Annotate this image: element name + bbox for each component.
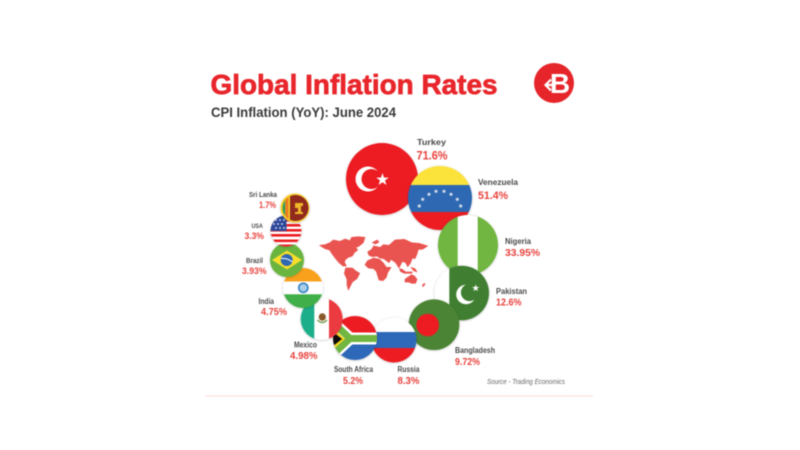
flag: Bangladesh	[409, 299, 459, 350]
icon: brand logo	[534, 63, 574, 103]
label: Pakistan	[496, 287, 527, 308]
label: Pakistan: 12.6%	[496, 296, 522, 308]
flag: Turkey	[346, 143, 418, 215]
label: USA	[244, 223, 264, 242]
label: Brazil: Brazil	[246, 258, 263, 265]
label: India: 4.75%	[261, 306, 288, 318]
label: Bangladesh: Bangladesh	[455, 346, 495, 355]
source note: Source - Trading Economics	[487, 379, 565, 386]
label: South Africa	[334, 365, 373, 387]
label: Mexico	[290, 340, 318, 362]
flag: USA	[270, 215, 302, 248]
flag: Venezuela	[405, 165, 475, 232]
label: Nigeria: Nigeria	[505, 237, 532, 246]
label: Venezuela	[478, 178, 519, 202]
label: Pakistan: Pakistan	[496, 287, 527, 296]
flag: India	[282, 267, 324, 309]
label: Nigeria	[505, 237, 541, 259]
label: South Africa: 5.2%	[343, 375, 364, 387]
label: Russia: Russia	[398, 365, 420, 374]
label: Turkey: Turkey	[417, 138, 447, 147]
label: Brazil: 3.93%	[242, 266, 267, 277]
label: Russia: 8.3%	[398, 375, 420, 387]
label: Bangladesh	[455, 346, 495, 368]
label: Bangladesh: 9.72%	[455, 356, 481, 368]
icon: brand logo: B	[550, 68, 570, 99]
label: India: India	[258, 297, 274, 306]
flag: Sri Lanka	[280, 194, 310, 222]
title: Global Inflation Rates	[210, 69, 498, 100]
flag: Russia	[373, 322, 418, 364]
label: Sri Lanka: 1.7%	[259, 200, 276, 211]
world map	[320, 237, 428, 290]
subtitle: CPI Inflation (YoY): June 2024	[211, 105, 396, 120]
flag: Nigeria	[436, 213, 500, 277]
label: Brazil	[242, 258, 267, 277]
label: USA: USA	[252, 223, 263, 230]
flag: South Africa	[328, 315, 380, 362]
label: Turkey	[416, 138, 448, 162]
label: Sri Lanka: Sri Lanka	[249, 192, 277, 199]
label: Turkey: 71.6%	[416, 148, 448, 162]
flag: Brazil	[270, 243, 304, 277]
label: Nigeria: 33.95%	[505, 247, 541, 259]
label: South Africa: South Africa	[334, 365, 373, 374]
label: Sri Lanka	[249, 192, 277, 211]
label: USA: 3.3%	[244, 231, 264, 242]
flag: Pakistan	[432, 264, 492, 322]
flag: Mexico	[300, 297, 344, 341]
label: Russia	[398, 365, 420, 387]
label: India	[258, 297, 288, 318]
label: Venezuela: 51.4%	[478, 190, 508, 202]
label: Mexico: 4.98%	[290, 350, 318, 362]
label: Mexico: Mexico	[294, 340, 317, 350]
label: Venezuela: Venezuela	[478, 178, 519, 187]
